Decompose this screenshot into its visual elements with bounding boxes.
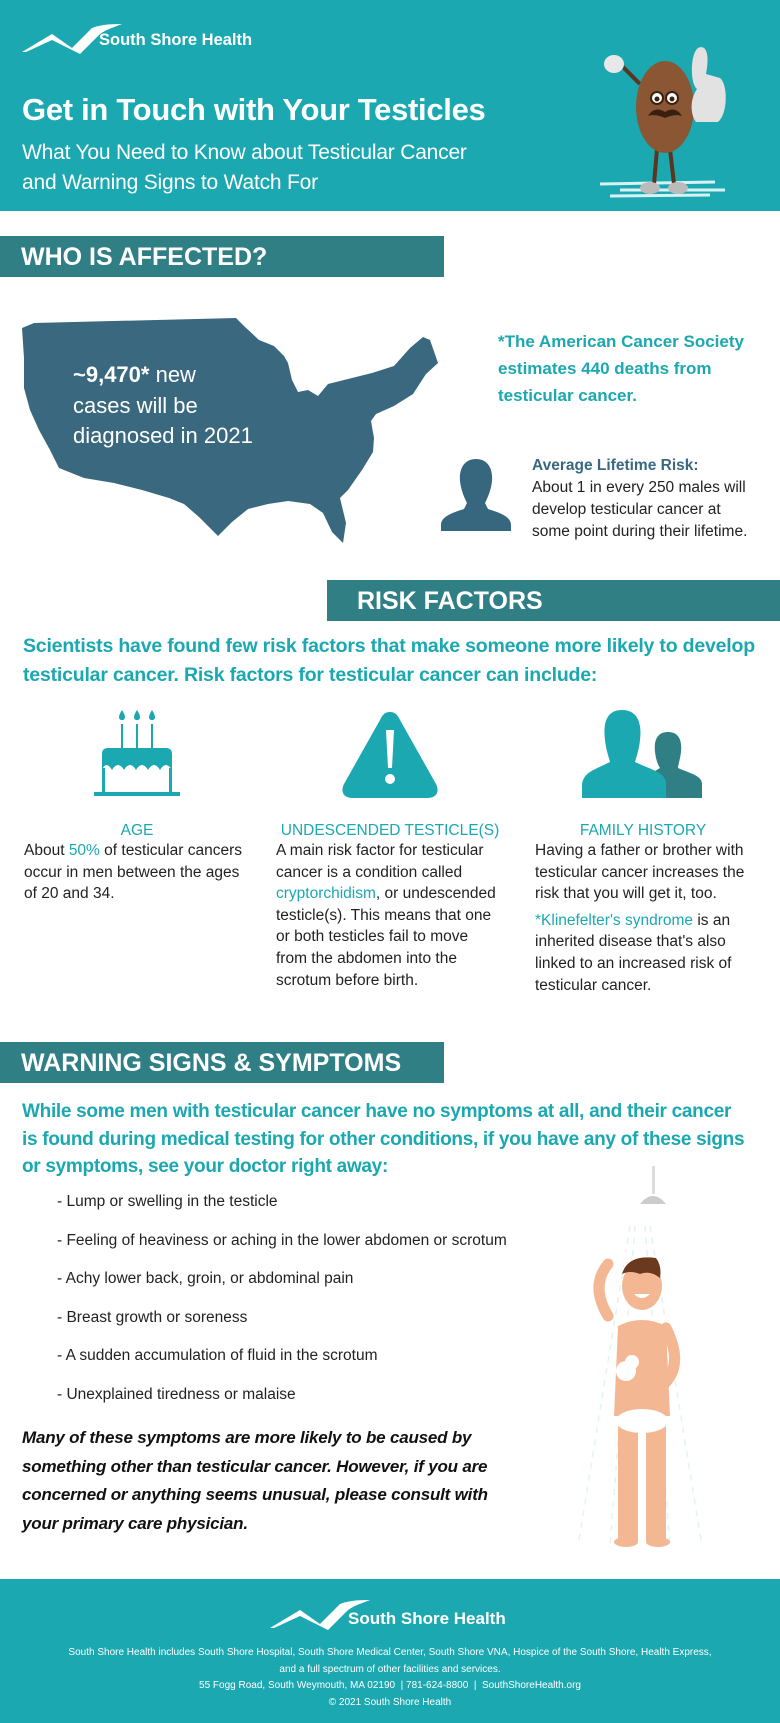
column: family history: testicular cancer. — [535, 977, 651, 994]
section bar: who is affected: WHO IS AFFECTED? — [21, 243, 267, 271]
column: family history: FAMILY HISTORY — [580, 822, 706, 839]
stat text — [73, 362, 253, 448]
subtitle: What You Need to Know about Testicular Cancer — [22, 141, 467, 164]
column: family history: testicular cancer increases the — [535, 864, 744, 881]
logo — [22, 24, 252, 54]
footer text: 55 Fogg Road, South Weymouth, MA 02190 | 781-624-8800 | SouthShoreHealth.org — [199, 1680, 581, 1691]
footer logo — [270, 1600, 506, 1630]
column: undescended: cancer is a condition called — [276, 864, 462, 881]
symptom list — [57, 1193, 507, 1402]
subtitle: and Warning Signs to Watch For — [22, 171, 318, 194]
footer — [0, 1579, 780, 1723]
lifetime risk text: some point during their lifetime. — [532, 523, 747, 540]
italic note — [21, 1428, 488, 1532]
risk intro — [23, 635, 755, 686]
column: age: AGE — [121, 822, 153, 839]
symptom list: - Feeling of heaviness or aching in the lower abdomen or scrotum — [57, 1232, 507, 1248]
column: undescended: scrotum before birth. — [276, 972, 418, 989]
icon: cake — [94, 710, 180, 796]
icon: family — [582, 710, 702, 798]
footer text: South Shore Health includes South Shore Hospital, South Shore Medical Center, South Shore VNA, Hospice of the South Shore, Health Express, — [68, 1647, 712, 1658]
footer logo: South Shore Health — [348, 1609, 506, 1628]
ACS callout: estimates 440 deaths from — [498, 359, 712, 378]
italic note: something other than testicular cancer. However, if you are — [22, 1456, 487, 1476]
symptom list: - Breast growth or soreness — [57, 1308, 247, 1326]
stat text: diagnosed in 2021 — [73, 423, 253, 448]
icon: warning triangle — [342, 712, 438, 798]
column: family history: inherited disease that's also — [535, 933, 726, 950]
italic note: Many of these symptoms are more likely to be caused by — [22, 1428, 471, 1447]
column: age: About 50% of testicular cancers — [24, 842, 242, 859]
footer text: and a full spectrum of other facilities and services. — [279, 1664, 501, 1674]
header band — [0, 0, 780, 211]
column: undescended — [276, 822, 499, 989]
column: undescended: testicle(s). This means that one — [276, 907, 491, 924]
lifetime risk text: Average Lifetime Risk: — [532, 457, 699, 474]
column: age: occur in men between the ages — [24, 864, 239, 881]
symptom list: - Unexplained tiredness or malaise — [57, 1386, 296, 1402]
subtitle — [22, 141, 467, 194]
risk intro: Scientists have found few risk factors that make someone more likely to develop — [23, 635, 755, 657]
section bar: warning signs: WARNING SIGNS & SYMPTOMS — [21, 1049, 401, 1077]
column: undescended: UNDESCENDED TESTICLE(S) — [281, 822, 499, 839]
warning intro: is found during medical testing for other conditions, if you have any of these signs — [22, 1128, 744, 1150]
column: family history: linked to an increased risk of — [535, 955, 731, 972]
warning intro: While some men with testicular cancer have no symptoms at all, and their cancer — [22, 1101, 731, 1122]
section bar: who is affected — [0, 236, 444, 277]
italic note: your primary care physician. — [22, 1514, 248, 1532]
warning intro: or symptoms, see your doctor right away: — [22, 1156, 388, 1177]
section bar: risk factors — [327, 580, 780, 621]
section bar: risk factors: RISK FACTORS — [357, 587, 543, 615]
column: undescended: A main risk factor for testicular — [276, 842, 484, 859]
column: family history: *Klinefelter's syndrome is an — [535, 912, 730, 929]
column: undescended: from the abdomen into the — [276, 950, 457, 967]
risk intro: testicular cancer. Risk factors for testicular cancer can include: — [23, 664, 597, 686]
column: age: of 20 and 34. — [24, 885, 114, 902]
footer text: © 2021 South Shore Health — [329, 1696, 451, 1708]
column: family history: risk that you will get it, too. — [535, 885, 717, 902]
shower man illustration — [578, 1166, 702, 1547]
lifetime risk text — [532, 457, 747, 540]
italic note: concerned or anything seems unusual, please consult with — [22, 1485, 488, 1504]
footer text — [68, 1647, 712, 1708]
ACS callout — [498, 332, 744, 405]
US map with stat — [22, 318, 438, 543]
mascot illustration — [600, 47, 726, 198]
stat text: cases will be — [73, 392, 198, 418]
column: undescended: or both testicles fail to move — [276, 928, 468, 945]
symptom list: - Lump or swelling in the testicle — [57, 1193, 278, 1210]
column: family history — [535, 822, 744, 994]
ACS callout: testicular cancer. — [498, 386, 637, 405]
logo: South Shore Health — [99, 31, 252, 49]
symptom list: - Achy lower back, groin, or abdominal pain — [57, 1270, 353, 1287]
section bar: warning signs — [0, 1042, 444, 1083]
lifetime risk text: About 1 in every 250 males will — [532, 479, 746, 496]
column: family history: Having a father or brother with — [535, 842, 744, 859]
stat text: ~9,470* new — [73, 362, 196, 387]
ACS callout: *The American Cancer Society — [498, 332, 744, 351]
column: age — [24, 822, 242, 902]
warning intro — [22, 1101, 744, 1177]
lifetime risk text: develop testicular cancer at — [532, 501, 721, 518]
title: Get in Touch with Your Testicles — [22, 92, 486, 127]
symptom list: - A sudden accumulation of fluid in the scrotum — [57, 1347, 378, 1364]
column: undescended: cryptorchidism, or undescended — [276, 885, 496, 902]
icon: person — [441, 459, 511, 531]
